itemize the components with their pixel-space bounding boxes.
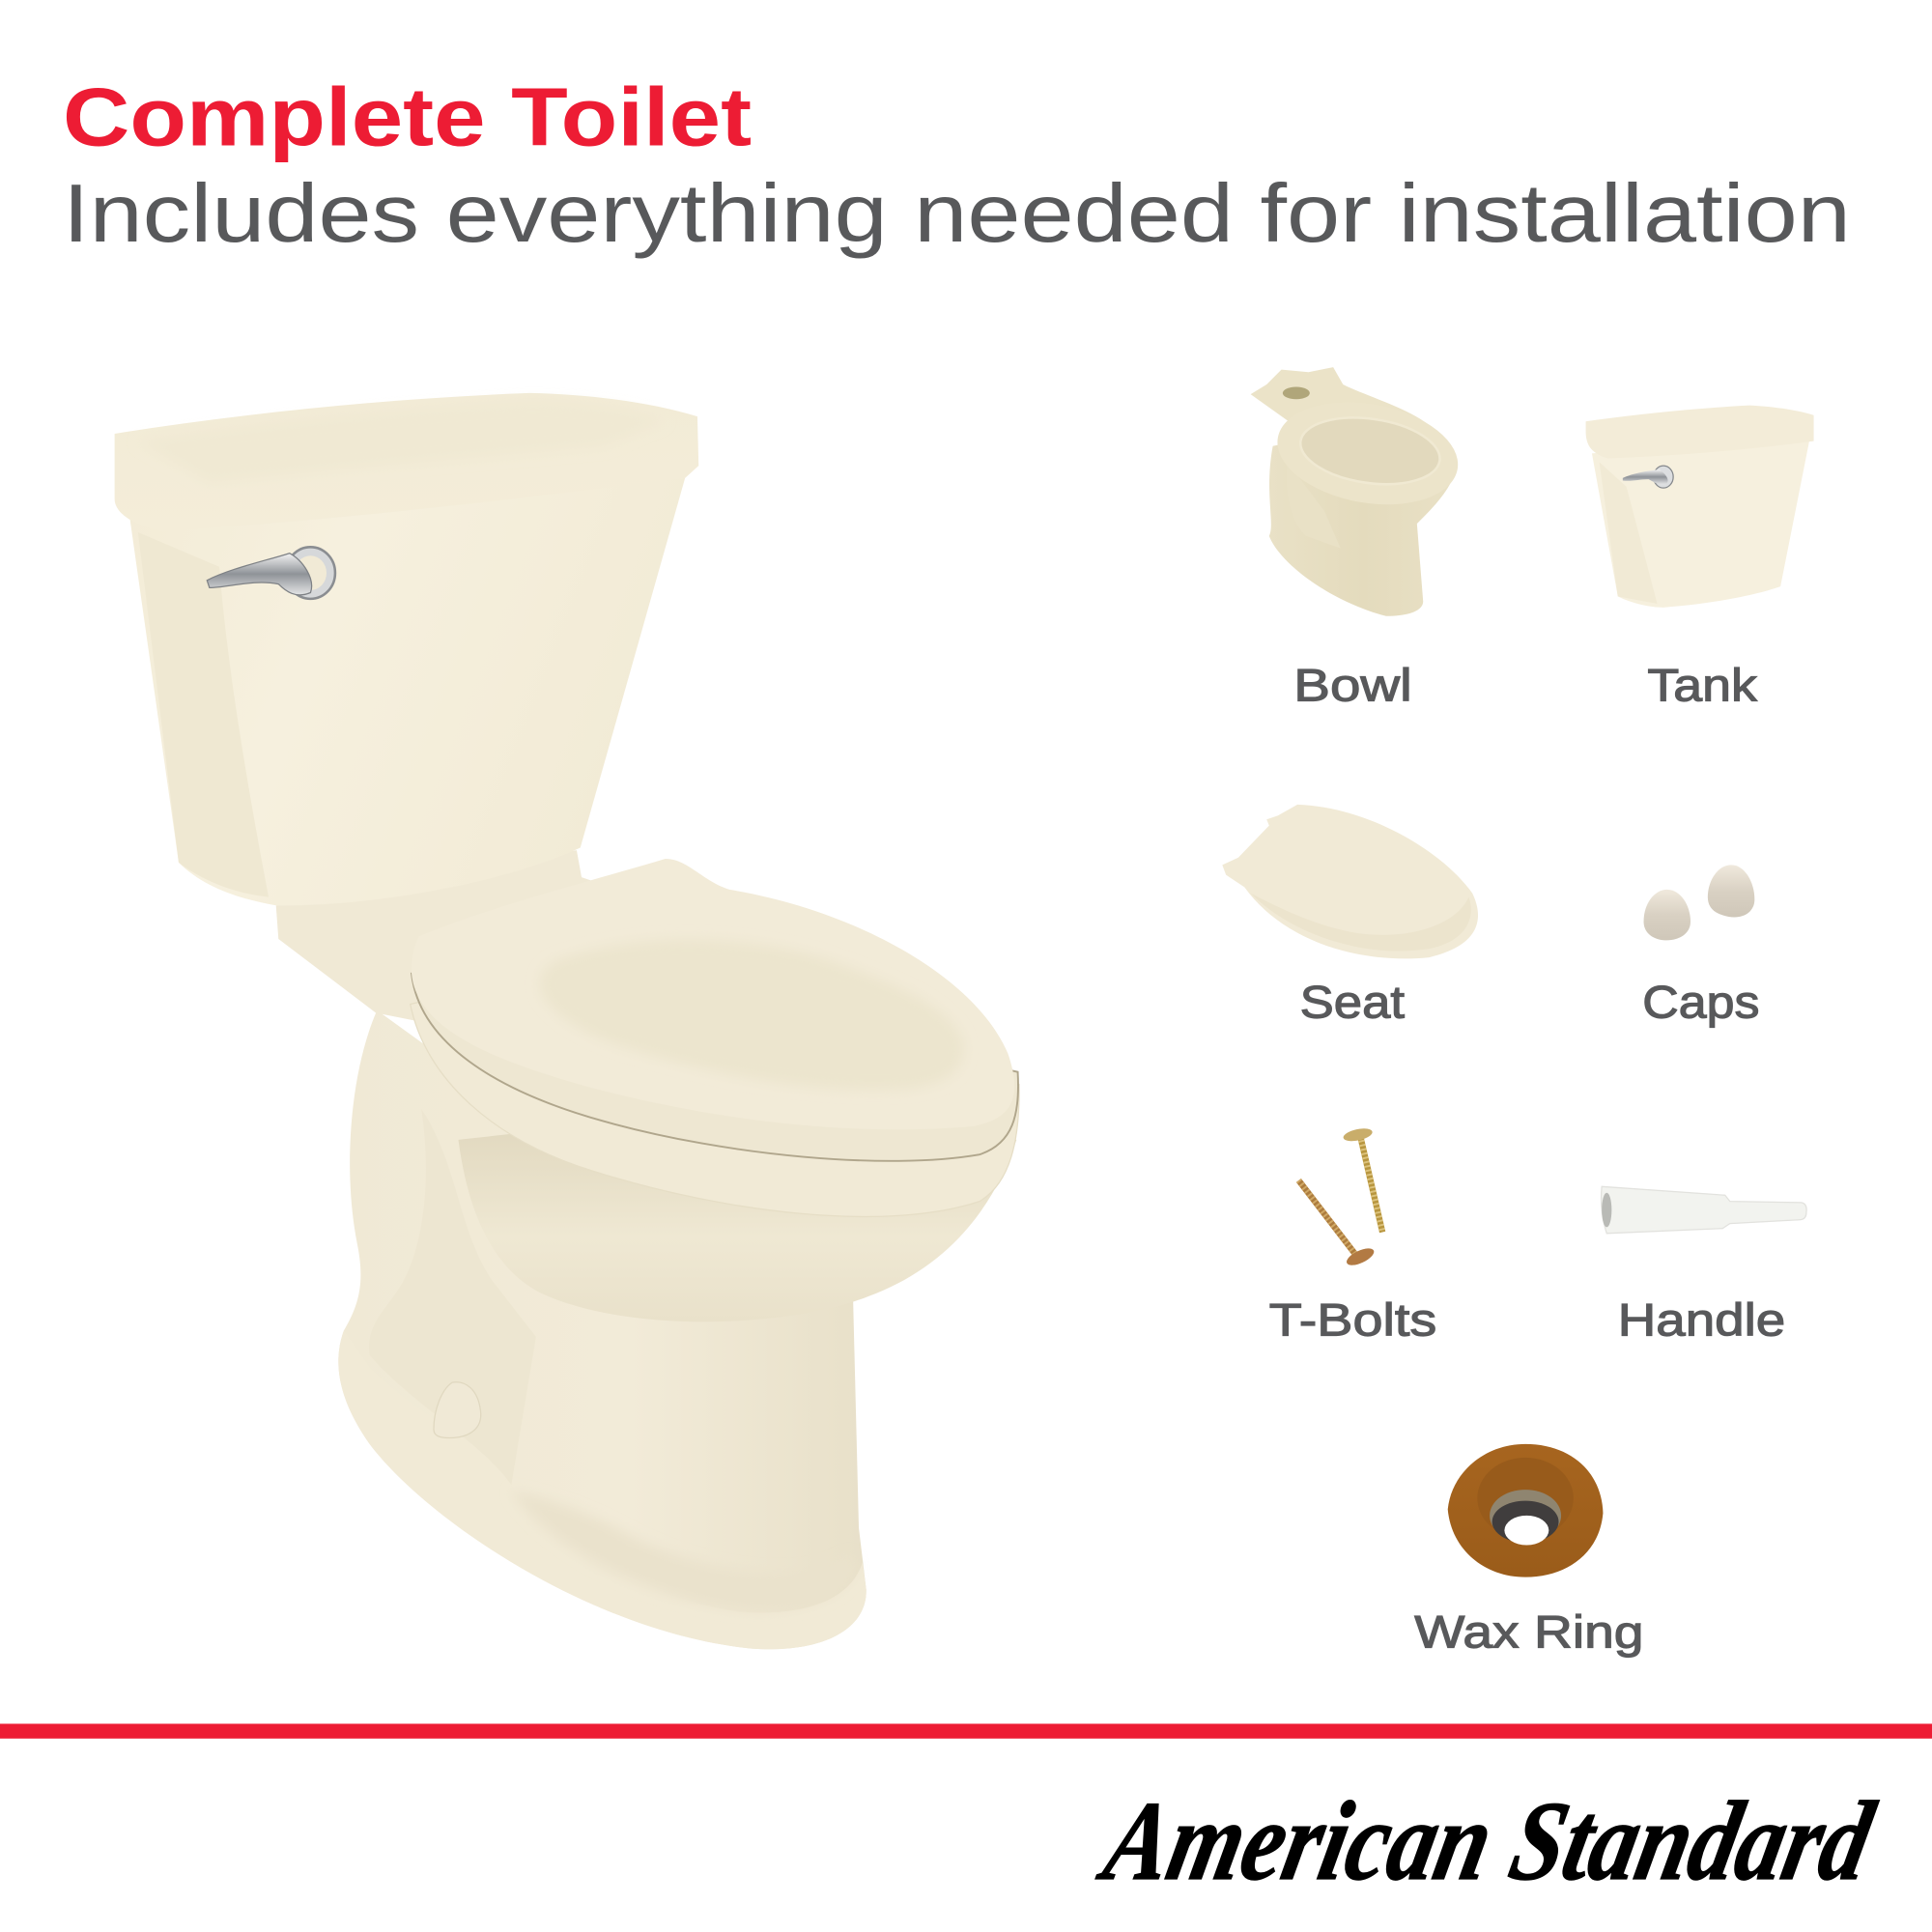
tank body (1592, 431, 1811, 608)
tank handle (1654, 466, 1673, 488)
seat ring (412, 949, 1018, 1161)
lid inner panel (540, 940, 964, 1090)
part: wax ring (1448, 1444, 1603, 1577)
label: Tank: Tank (1647, 661, 1757, 712)
seat lid (412, 859, 1014, 1129)
tank facet (138, 532, 269, 897)
handle lever (207, 554, 312, 595)
label: Wax Ring: Wax Ring (1414, 1606, 1644, 1658)
floor bolt cap (434, 1382, 481, 1438)
floor shadow by pedestal (511, 1491, 856, 1610)
seat shape (1222, 805, 1478, 958)
lid top panel (138, 402, 666, 483)
bowl rim (1269, 389, 1466, 518)
bowl recess (1287, 462, 1341, 549)
part: bowl (1251, 367, 1466, 616)
handle tube (1602, 1186, 1806, 1234)
subtitle: Includes everything needed for installation (63, 168, 1851, 260)
flush handle (207, 547, 335, 599)
supply hole (1283, 387, 1310, 399)
metal sleeve (1490, 1490, 1561, 1542)
bolt two (1360, 1136, 1382, 1233)
label: Seat: Seat (1300, 978, 1405, 1029)
main toilet illustration (115, 393, 1019, 1649)
handle opening (1602, 1193, 1611, 1227)
part: seat (1222, 805, 1478, 958)
cap left (1644, 890, 1690, 940)
label: Bowl: Bowl (1293, 661, 1412, 712)
bowl rear deck (1251, 367, 1430, 487)
bowl pedestal (1269, 431, 1458, 616)
ring hole (1504, 1516, 1548, 1545)
black sleeve (1492, 1501, 1559, 1543)
rim (411, 985, 1019, 1216)
label: Caps: Caps (1642, 978, 1759, 1029)
floor surface around pedestal (338, 1331, 867, 1649)
bolt one (1298, 1180, 1355, 1254)
red divider bar (0, 1723, 1932, 1739)
part: handle (1602, 1186, 1806, 1234)
tank body (129, 478, 685, 906)
rear recess shadow (369, 1109, 536, 1485)
cap right (1708, 865, 1754, 917)
label: Handle: Handle (1618, 1295, 1785, 1347)
bowl opening (1296, 410, 1444, 493)
part: caps (1644, 865, 1754, 940)
ring outer (1448, 1444, 1603, 1577)
part: t-bolts (1298, 1126, 1382, 1268)
bowl body (458, 1109, 1016, 1321)
tank lid (1586, 406, 1814, 458)
toilet base foot and pedestal (338, 1010, 867, 1649)
title: Complete Toilet: Complete Toilet (63, 72, 752, 164)
tank lid (115, 393, 698, 531)
part: tank (1586, 406, 1814, 608)
tank facet (1600, 462, 1658, 604)
handle plate (286, 547, 335, 599)
label: T-Bolts: T-Bolts (1269, 1295, 1436, 1347)
ring inner wall (1477, 1458, 1574, 1539)
seat rim highlight (1251, 894, 1471, 952)
neck connecting tank to bowl (276, 850, 629, 1023)
